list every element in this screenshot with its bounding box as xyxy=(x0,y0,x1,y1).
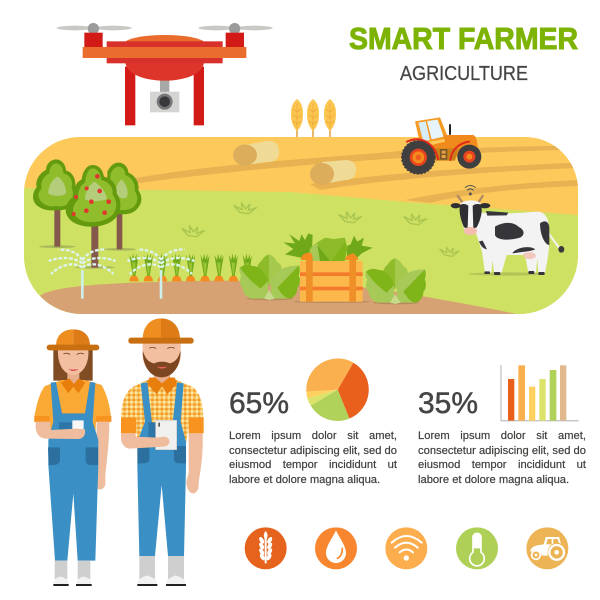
paragraph right: eiusmod tempor incididunt ut xyxy=(418,459,586,471)
icon: water drop xyxy=(315,527,357,569)
paragraph right xyxy=(418,430,586,486)
farm landscape panel xyxy=(24,137,578,316)
crate straps xyxy=(306,252,313,302)
paragraph left: eiusmod tempor incididunt ut xyxy=(229,459,397,471)
icon: wifi xyxy=(385,527,427,569)
socks and shoes xyxy=(137,556,186,586)
hat xyxy=(143,318,161,339)
hay bale back xyxy=(233,141,279,166)
crate with vegetables xyxy=(283,233,373,303)
collar xyxy=(61,378,85,393)
grill xyxy=(440,149,447,160)
cow xyxy=(451,185,564,276)
right arm xyxy=(186,433,203,493)
title: SMART FARMER xyxy=(349,21,578,56)
beard xyxy=(143,351,181,377)
paragraph right: labore et dolore magna aliqua. xyxy=(418,474,569,486)
hood xyxy=(432,135,478,160)
neck and head xyxy=(154,370,170,385)
wifi signal xyxy=(465,185,476,195)
sprinkler left xyxy=(49,249,116,299)
paragraph right: Lorem ipsum dolor sit amet, xyxy=(418,430,586,442)
rear wheel xyxy=(402,141,435,174)
plaid shirt xyxy=(121,380,203,442)
pockets xyxy=(48,422,98,465)
icon: thermometer xyxy=(456,527,498,569)
paragraph left: consectetur adipiscing elit, sed do xyxy=(229,445,397,457)
farmers xyxy=(34,318,204,586)
subtitle: AGRICULTURE xyxy=(400,63,528,85)
drone camera xyxy=(150,78,179,112)
collar xyxy=(147,377,177,394)
icon: tractor xyxy=(526,527,568,569)
cab xyxy=(415,117,448,143)
drone xyxy=(57,23,273,125)
drone propellers xyxy=(57,23,273,34)
icon: wheat xyxy=(245,527,287,569)
yellow field xyxy=(24,137,578,314)
apples xyxy=(72,174,111,216)
carrot row xyxy=(129,253,252,281)
grass tufts xyxy=(182,203,459,256)
pockets xyxy=(137,422,186,463)
hair xyxy=(53,350,93,381)
socks and shoes xyxy=(53,561,92,586)
crate carrot tops xyxy=(283,233,373,258)
sprinkler right xyxy=(127,249,194,299)
drone legs xyxy=(125,67,204,125)
lettuce left xyxy=(239,254,300,300)
paragraph left xyxy=(229,430,397,486)
paragraph left: labore et dolore magna aliqua. xyxy=(229,474,380,486)
drone body xyxy=(83,33,246,81)
left arm xyxy=(121,433,170,449)
phone xyxy=(72,420,84,431)
face details xyxy=(63,353,84,355)
trees xyxy=(33,159,252,299)
man farmer xyxy=(121,318,204,586)
tree right xyxy=(103,163,141,251)
eyes xyxy=(149,347,175,349)
field furrows xyxy=(132,146,578,203)
apple tree xyxy=(66,165,120,269)
right arm xyxy=(93,422,109,489)
lettuce right xyxy=(365,258,426,304)
neck and head xyxy=(67,370,79,387)
shirt xyxy=(34,380,111,443)
stat 35 percent: 35% xyxy=(418,387,478,420)
crate lettuce xyxy=(309,238,347,261)
wheat stalks xyxy=(291,99,336,140)
stat 65 percent: 65% xyxy=(229,387,289,420)
icon row xyxy=(245,527,568,569)
overalls xyxy=(137,382,186,556)
overalls xyxy=(48,382,98,561)
woman farmer xyxy=(34,329,111,586)
crate box xyxy=(300,261,363,302)
soil path xyxy=(40,281,525,316)
sleeve cuffs xyxy=(121,417,204,433)
pie chart xyxy=(306,358,369,421)
paragraph left: Lorem ipsum dolor sit amet, xyxy=(229,430,397,442)
sleeve cuffs xyxy=(34,416,111,422)
green meadow xyxy=(24,188,578,314)
paragraph right: consectetur adipiscing elit, sed do xyxy=(418,445,586,457)
bar chart xyxy=(501,365,579,421)
tablet xyxy=(156,420,177,450)
hay bale front xyxy=(310,160,356,185)
hat xyxy=(56,329,73,346)
front wheel xyxy=(457,145,481,169)
tree left xyxy=(33,159,76,248)
fenders xyxy=(407,139,469,160)
tractor xyxy=(402,117,481,174)
left arm xyxy=(36,422,85,439)
exhaust xyxy=(447,125,453,134)
